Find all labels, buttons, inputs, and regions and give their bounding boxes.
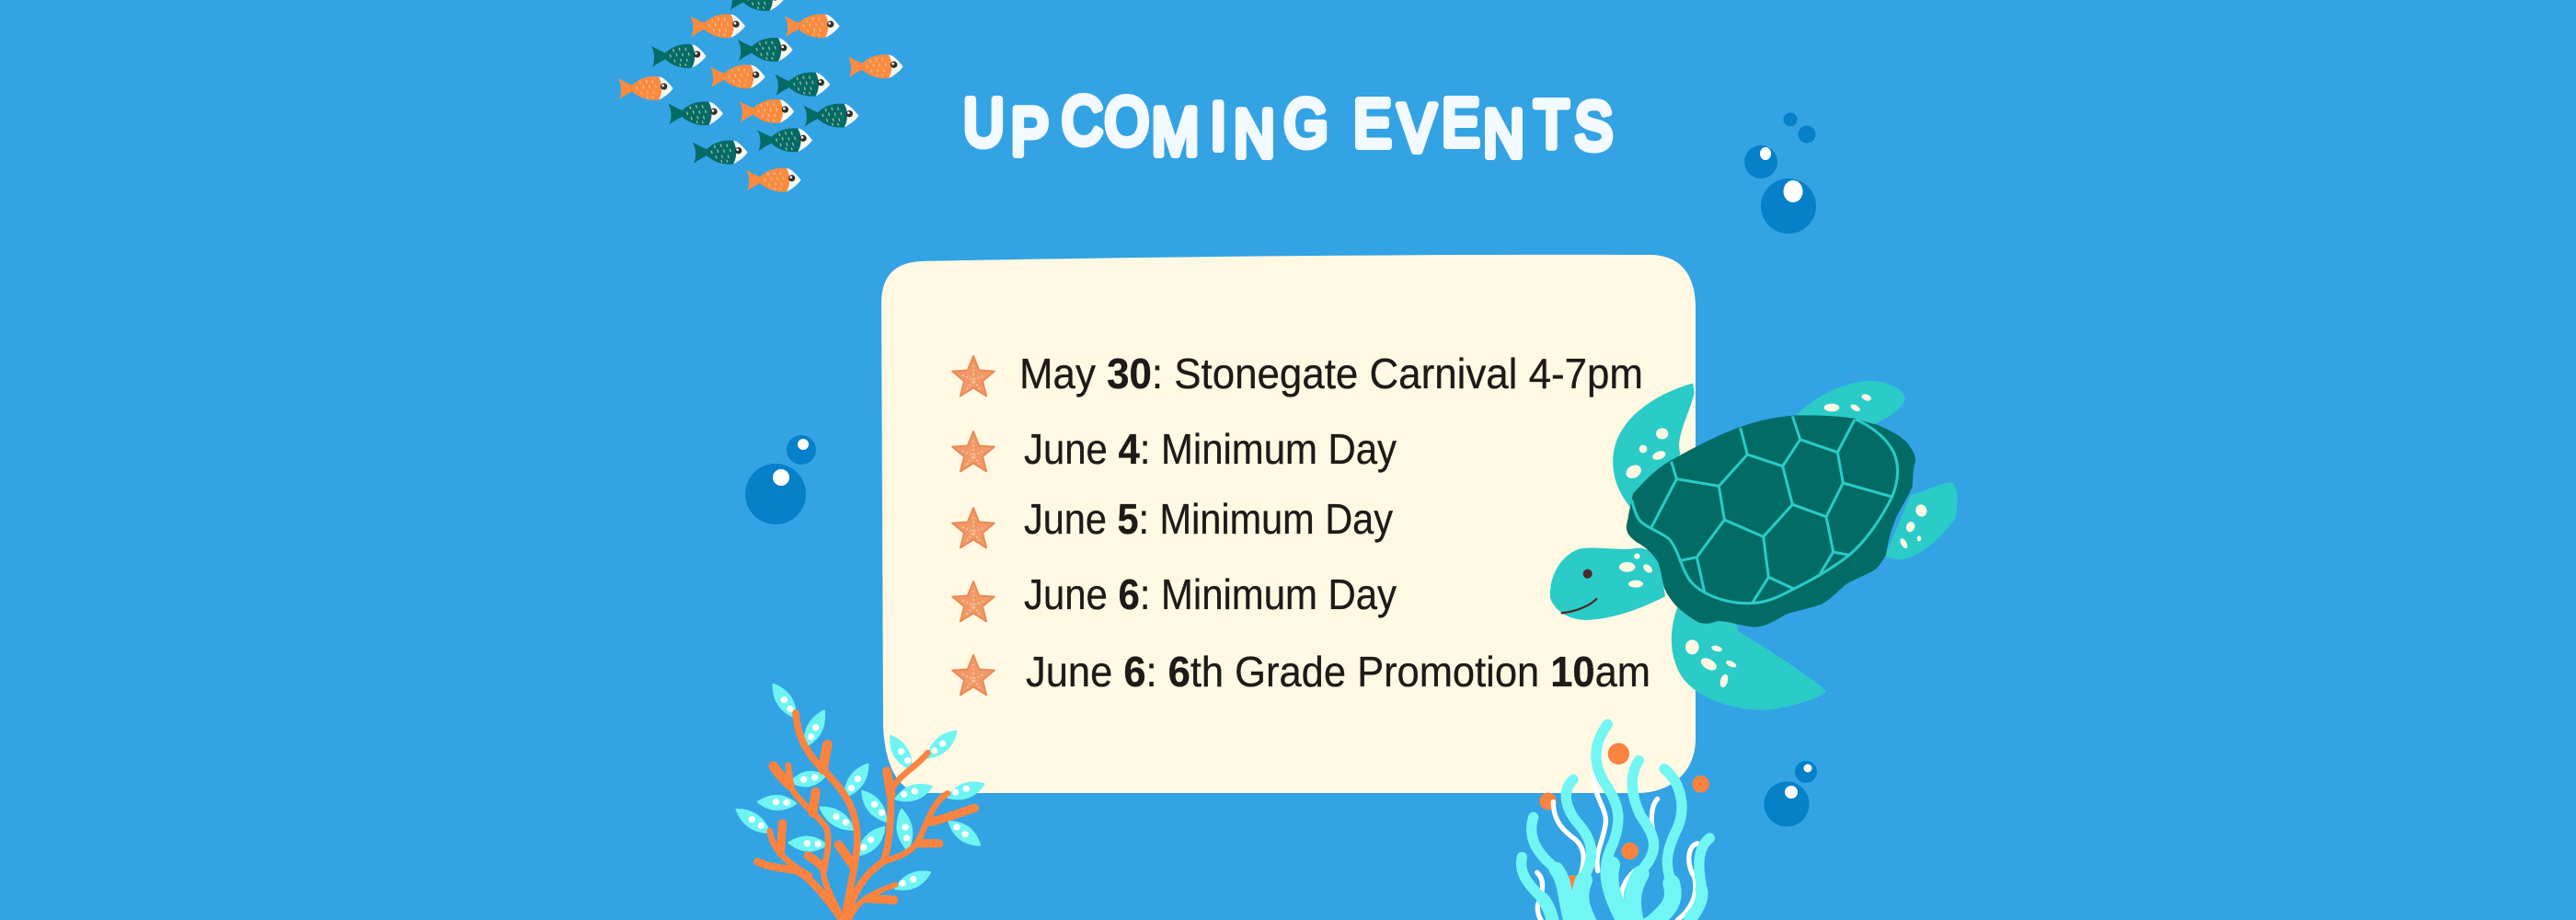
orange dots — [1539, 743, 1709, 892]
icon: school of fish — [618, 0, 903, 192]
turtle shell — [1627, 415, 1915, 627]
icon: seaweed with orange dots — [1521, 724, 1709, 920]
event line 4: June 6: Minimum Day — [1024, 570, 1397, 618]
icon: star bullet 2 — [952, 431, 995, 471]
event line 3: June 5: Minimum Day — [1024, 495, 1393, 543]
cyan strands — [1521, 724, 1709, 920]
panel: event list card — [881, 255, 1696, 793]
icon: star bullet 5 — [952, 655, 995, 695]
white strands — [1537, 773, 1697, 920]
icon: orange coral with leaves — [737, 684, 983, 920]
icon: bubbles bottom right — [1765, 761, 1817, 826]
coral branches — [757, 713, 974, 920]
icon: star bullet 1 — [952, 356, 995, 396]
leaf dots — [749, 696, 970, 887]
turtle flippers — [1550, 381, 1958, 710]
event line 5: June 6: 6th Grade Promotion 10am — [1026, 648, 1650, 696]
thickened strand bases — [1543, 865, 1702, 920]
icon: bubbles top right — [1744, 112, 1816, 234]
turtle face — [1562, 569, 1596, 613]
icon: star bullet 3 — [952, 508, 995, 547]
title: UPCOMING EVENTS — [963, 85, 1613, 171]
turtle spots — [1619, 393, 1928, 688]
event line 2: June 4: Minimum Day — [1024, 425, 1397, 473]
icon: sea turtle — [1550, 381, 1958, 710]
icon: star bullet 4 — [952, 581, 995, 621]
coral leaves — [737, 684, 983, 890]
icon: bubbles left — [745, 435, 816, 524]
event line 1: May 30: Stonegate Carnival 4-7pm — [1019, 350, 1643, 397]
